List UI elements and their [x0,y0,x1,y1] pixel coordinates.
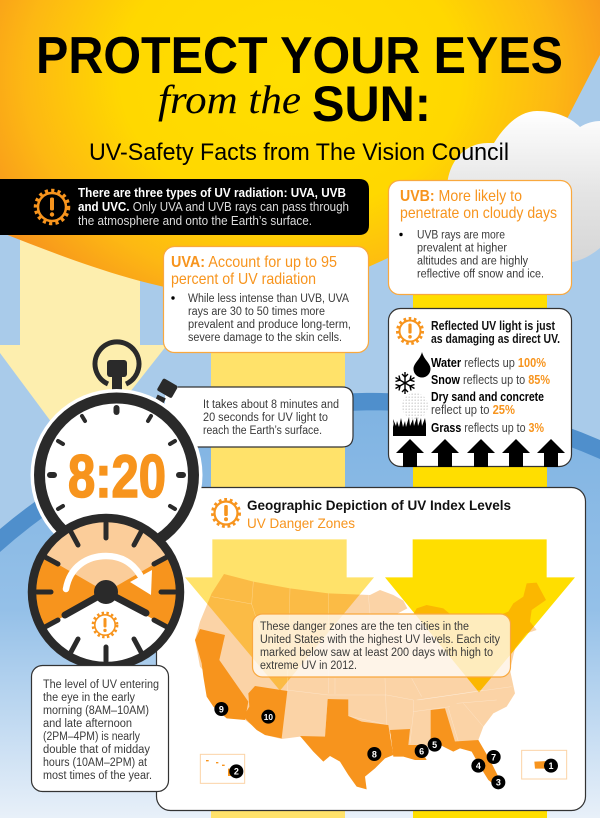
clock: rim [32,518,180,666]
panel: UVB [388,180,572,294]
markers: cities: 2 [234,767,239,777]
text: level of UV: the eye in the early [43,692,135,704]
clock: midday sector [42,518,170,592]
text: reflect values: Water reflects up 100% [431,356,546,370]
heading: UVA: UVA: Account for up to 95 [171,254,337,271]
sun [0,0,600,296]
text: level of UV: and late afternoon [43,718,132,730]
clock: ticks [37,523,175,661]
text: danger zones [260,621,500,672]
text: reflect values [431,356,550,435]
markers: cities: 5 [432,740,437,750]
arrow: bright yellow [385,539,575,692]
panel: UVA [164,246,368,352]
map: Arizona [243,686,287,738]
icon: warning sun [36,190,68,224]
text: reflect values: Dry sand and concrete [431,390,544,404]
icon: sand dots [402,393,428,419]
arrow: UVA shaft [211,340,345,818]
bullet text: UVA [171,293,351,344]
title: from the: from the [158,77,301,122]
text: 8 minutes [203,399,339,437]
stopwatch: top ring [95,342,139,384]
arrows: reflected upward [396,439,565,467]
clock: face [32,518,180,666]
arrow: pale yellow [185,539,374,691]
stopwatch: side button [155,378,178,404]
text: three types: the atmosphere and onto the Earth’s surface. [78,214,312,228]
clock: hands [65,584,146,615]
heading: reflected [431,319,560,346]
text: three types [78,186,349,228]
bullet text: UVA: While less intense than UVB, UVA [188,293,349,305]
subtitle: UV-Safety Facts from The Vision Council [89,139,509,166]
markers: cities: 10 [264,712,273,722]
bullet text: UVB: altitudes and are highly [417,256,528,268]
map: US UV levels [185,539,575,789]
map: Hawaii inset [200,754,245,783]
title: SUN: SUN: [312,76,431,132]
stopwatch: ticks [50,408,183,534]
map: California [195,629,248,720]
markers: cities [214,702,558,789]
stopwatch: 8:20 readout: 8:20 [68,443,166,510]
clock: afternoon sector [106,555,180,629]
markers: cities: 7 [491,752,496,762]
map: Alabama [431,708,455,748]
stopwatch: crown [107,360,127,392]
text: reflect values: reflect up to 25% [431,403,515,417]
text: danger zones: United States with the highest UV levels. Each city [260,634,500,646]
stopwatch: face [30,389,202,561]
text: level of UV: The level of UV entering [43,679,159,691]
markers: cities: 4 [476,761,481,771]
clock: motion arrow [66,556,152,595]
text: three types: and UVC. Only UVA and UVB rays can pass through [78,200,349,214]
markers: cities: 9 [219,704,224,714]
bullet text: UVB [399,230,544,280]
map: Louisiana [390,729,427,760]
icon: warning sun [93,613,117,637]
heading: UVB: penetrate on cloudy days [400,205,557,222]
icon: snowflake [396,372,414,394]
text: level of UV: morning (8AM–10AM) [43,705,149,717]
bullet text: UVB: UVB rays are more [417,230,505,242]
bullet text: UVA: severe damage to the skin cells. [188,332,342,344]
bullet text: UVA: rays are 30 to 50 times more [188,306,325,318]
panel: level of UV callout [32,666,168,792]
clock: morning sector [32,555,106,629]
heading: reflected: as damaging as direct UV. [431,332,560,346]
text: 8 minutes: 20 seconds for UV light to [203,412,328,424]
icon: warning sun [398,318,422,344]
markers: cities: 6 [419,746,424,756]
map: state lines [212,582,512,743]
text: danger zones: marked below saw at least 200 days with high to [260,647,493,659]
heading: UVA [171,254,337,288]
title: PROTECT YOUR EYES [36,27,563,85]
callout: danger zones [252,614,510,677]
heading: geographic depiction: Geographic Depiction of UV Index Levels [247,498,511,513]
text: level of UV: (2PM–4PM) is nearly [43,731,140,743]
panel: three types of UV [0,179,369,235]
panel: UV danger zones [156,488,586,810]
arrow: UVB shaft [413,280,547,818]
text: reflect values: Snow reflects up to 85% [431,373,550,387]
map: Florida [437,740,498,787]
map: US base [195,574,546,747]
panel: reflected UV [388,308,572,467]
heading: UVA: percent of UV radiation [171,271,316,288]
map: Texas [300,699,393,789]
text: three types: There are three types of UV radiation: UVA, UVB [78,186,346,200]
icon: water drop [414,352,430,378]
text: danger zones: extreme UV in 2012. [260,660,357,672]
subheading: danger zones: UV Danger Zones [247,515,355,531]
icon: stopwatch [30,342,202,561]
heading: UVB [400,188,557,222]
text: danger zones: These danger zones are the ten cities in the [260,621,469,633]
earth curve [0,393,600,818]
text: level of UV [43,679,159,782]
text: reflect values: Grass reflects up to 3% [431,421,544,435]
heading: reflected: Reflected UV light is just [431,319,556,333]
heading: UVB: UVB: More likely to [400,188,522,205]
icon: UV exposure clock [32,518,180,666]
bullet text: UVA: prevalent and produce long-term, [188,319,351,331]
text: 8 minutes: It takes about 8 minutes and [203,399,339,411]
bullet text: UVB: reflective off snow and ice. [417,268,544,280]
panel: 8 minutes callout [165,387,353,447]
text: level of UV: double that of midday [43,744,150,756]
markers: cities: 8 [372,749,377,759]
markers: cities: 1 [548,761,553,771]
bullet text: UVB: prevalent at higher [417,242,507,254]
text: level of UV: hours (10AM–2PM) at [43,757,148,769]
markers: cities: 3 [496,778,501,788]
icon: warning sun [212,500,240,526]
text: 8 minutes: reach the Earth’s surface. [203,425,322,437]
icon: grass [393,417,426,436]
map: Puerto Rico inset [522,750,567,779]
cloud [447,111,600,263]
arrow: UVA cream [0,225,167,458]
text: level of UV: most times of the year. [43,770,152,782]
